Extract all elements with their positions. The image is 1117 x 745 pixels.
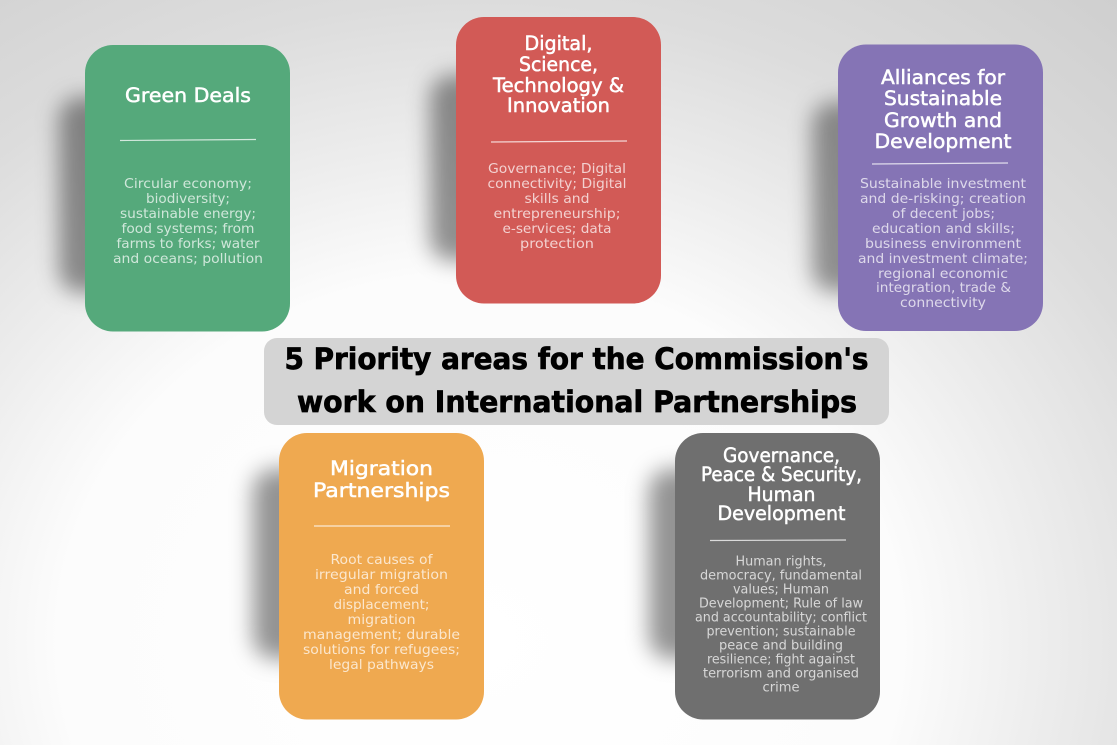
heading: Governance, Peace & Security, Human Development: Peace & Security, — [701, 463, 862, 486]
heading: Governance, Peace & Security, Human Development: Development — [718, 502, 846, 525]
text: Governance topics: Human rights, — [736, 554, 826, 570]
text: Alliances topics: integration, trade & — [876, 280, 1011, 296]
text: Alliances topics: connectivity — [900, 295, 986, 311]
text: Digital topics: e-services; data — [502, 221, 612, 237]
text: Digital topics: entrepreneurship; — [494, 206, 620, 222]
text: Alliances topics: and de-risking; creation — [860, 191, 1026, 207]
text: Migration topics: migration — [348, 612, 416, 628]
text: Governance topics: crime — [762, 680, 800, 696]
heading: Governance, Peace & Security, Human Development: Human — [748, 483, 816, 506]
panel: Alliances for Sustainable Growth and Development — [812, 44, 1043, 331]
heading: Green Deals: Green Deals — [125, 84, 251, 107]
panel: Digital, Science, Technology & Innovation — [430, 17, 661, 304]
text: Alliances topics: Sustainable investment — [860, 176, 1026, 192]
heading: Digital, Science, Technology & Innovation: Innovation — [507, 94, 610, 117]
text: Digital topics: protection — [520, 236, 594, 252]
heading: Migration Partnerships: Partnerships — [313, 479, 450, 502]
text: Migration topics: solutions for refugees; — [303, 642, 460, 658]
text: Governance topics: Development; Rule of law — [699, 596, 863, 612]
heading: Digital, Science, Technology & Innovation: Science, — [519, 53, 598, 76]
text: Migration topics — [303, 552, 460, 673]
text: Governance topics: peace and building — [719, 638, 843, 654]
heading: Alliances for Sustainable Growth and Development — [874, 66, 1012, 153]
heading: Digital, Science, Technology & Innovation: Digital, — [524, 32, 592, 55]
heading: Digital, Science, Technology & Innovation: Technology & — [492, 74, 624, 97]
text: Migration topics: Root causes of — [330, 552, 434, 568]
title: work on International Partnerships — [297, 385, 857, 419]
text: Alliances topics: of decent jobs; — [892, 206, 995, 222]
panel: Governance, Peace & Security, Human Development — [649, 433, 880, 720]
heading: Alliances for Sustainable Growth and Development: Growth and — [884, 109, 1002, 132]
panel: Green Deals — [59, 45, 290, 332]
text: Green Deals topics — [113, 176, 263, 267]
text: Alliances topics — [858, 176, 1028, 311]
text: Governance topics — [695, 554, 867, 696]
text: Governance topics: values; Human — [733, 582, 829, 598]
heading: Alliances for Sustainable Growth and Development: Development — [874, 130, 1012, 153]
title: 5 Priority areas for the Commission's — [284, 342, 868, 376]
panel: Migration Partnerships — [253, 433, 484, 720]
text: Migration topics: and forced — [344, 582, 419, 598]
text: Migration topics: irregular migration — [315, 567, 448, 583]
text: Green Deals topics: sustainable energy; — [120, 206, 256, 222]
heading: Governance, Peace & Security, Human Development — [701, 444, 862, 525]
text: Green Deals topics: biodiversity; — [146, 191, 230, 207]
text: Governance topics: and accountability; conflict — [695, 610, 867, 626]
heading: Migration Partnerships: Migration — [330, 457, 433, 480]
text: Digital topics — [488, 161, 626, 252]
text: Green Deals topics: farms to forks; water — [116, 236, 260, 252]
text: Alliances topics: education and skills; — [872, 221, 1015, 237]
text: Governance topics: resilience; fight against — [707, 652, 855, 668]
text: Green Deals topics: Circular economy; — [124, 176, 252, 192]
text: Digital topics: Governance; Digital — [488, 161, 626, 177]
text: Digital topics: skills and — [524, 191, 590, 207]
text: Alliances topics: and investment climate; — [858, 251, 1028, 267]
text: Migration topics: displacement; — [334, 597, 430, 613]
text: Alliances topics: business environment — [865, 236, 1021, 252]
text: Migration topics: legal pathways — [329, 657, 434, 673]
text: Alliances topics: regional economic — [878, 266, 1008, 282]
heading: Migration Partnerships — [313, 457, 450, 502]
text: Governance topics: prevention; sustainable — [706, 624, 856, 640]
text: Green Deals topics: and oceans; pollution — [113, 251, 263, 267]
text: Green Deals topics: food systems; from — [122, 221, 254, 237]
heading: Alliances for Sustainable Growth and Development: Alliances for — [881, 66, 1006, 89]
title — [264, 338, 889, 425]
text: Digital topics: connectivity; Digital — [488, 176, 626, 192]
text: Governance topics: democracy, fundamental — [700, 568, 862, 584]
text: Migration topics: management; durable — [303, 627, 460, 643]
heading: Digital, Science, Technology & Innovation — [492, 32, 624, 117]
heading: Governance, Peace & Security, Human Development: Governance, — [723, 444, 840, 467]
heading: Alliances for Sustainable Growth and Development: Sustainable — [884, 87, 1002, 110]
text: Governance topics: terrorism and organised — [703, 666, 859, 682]
